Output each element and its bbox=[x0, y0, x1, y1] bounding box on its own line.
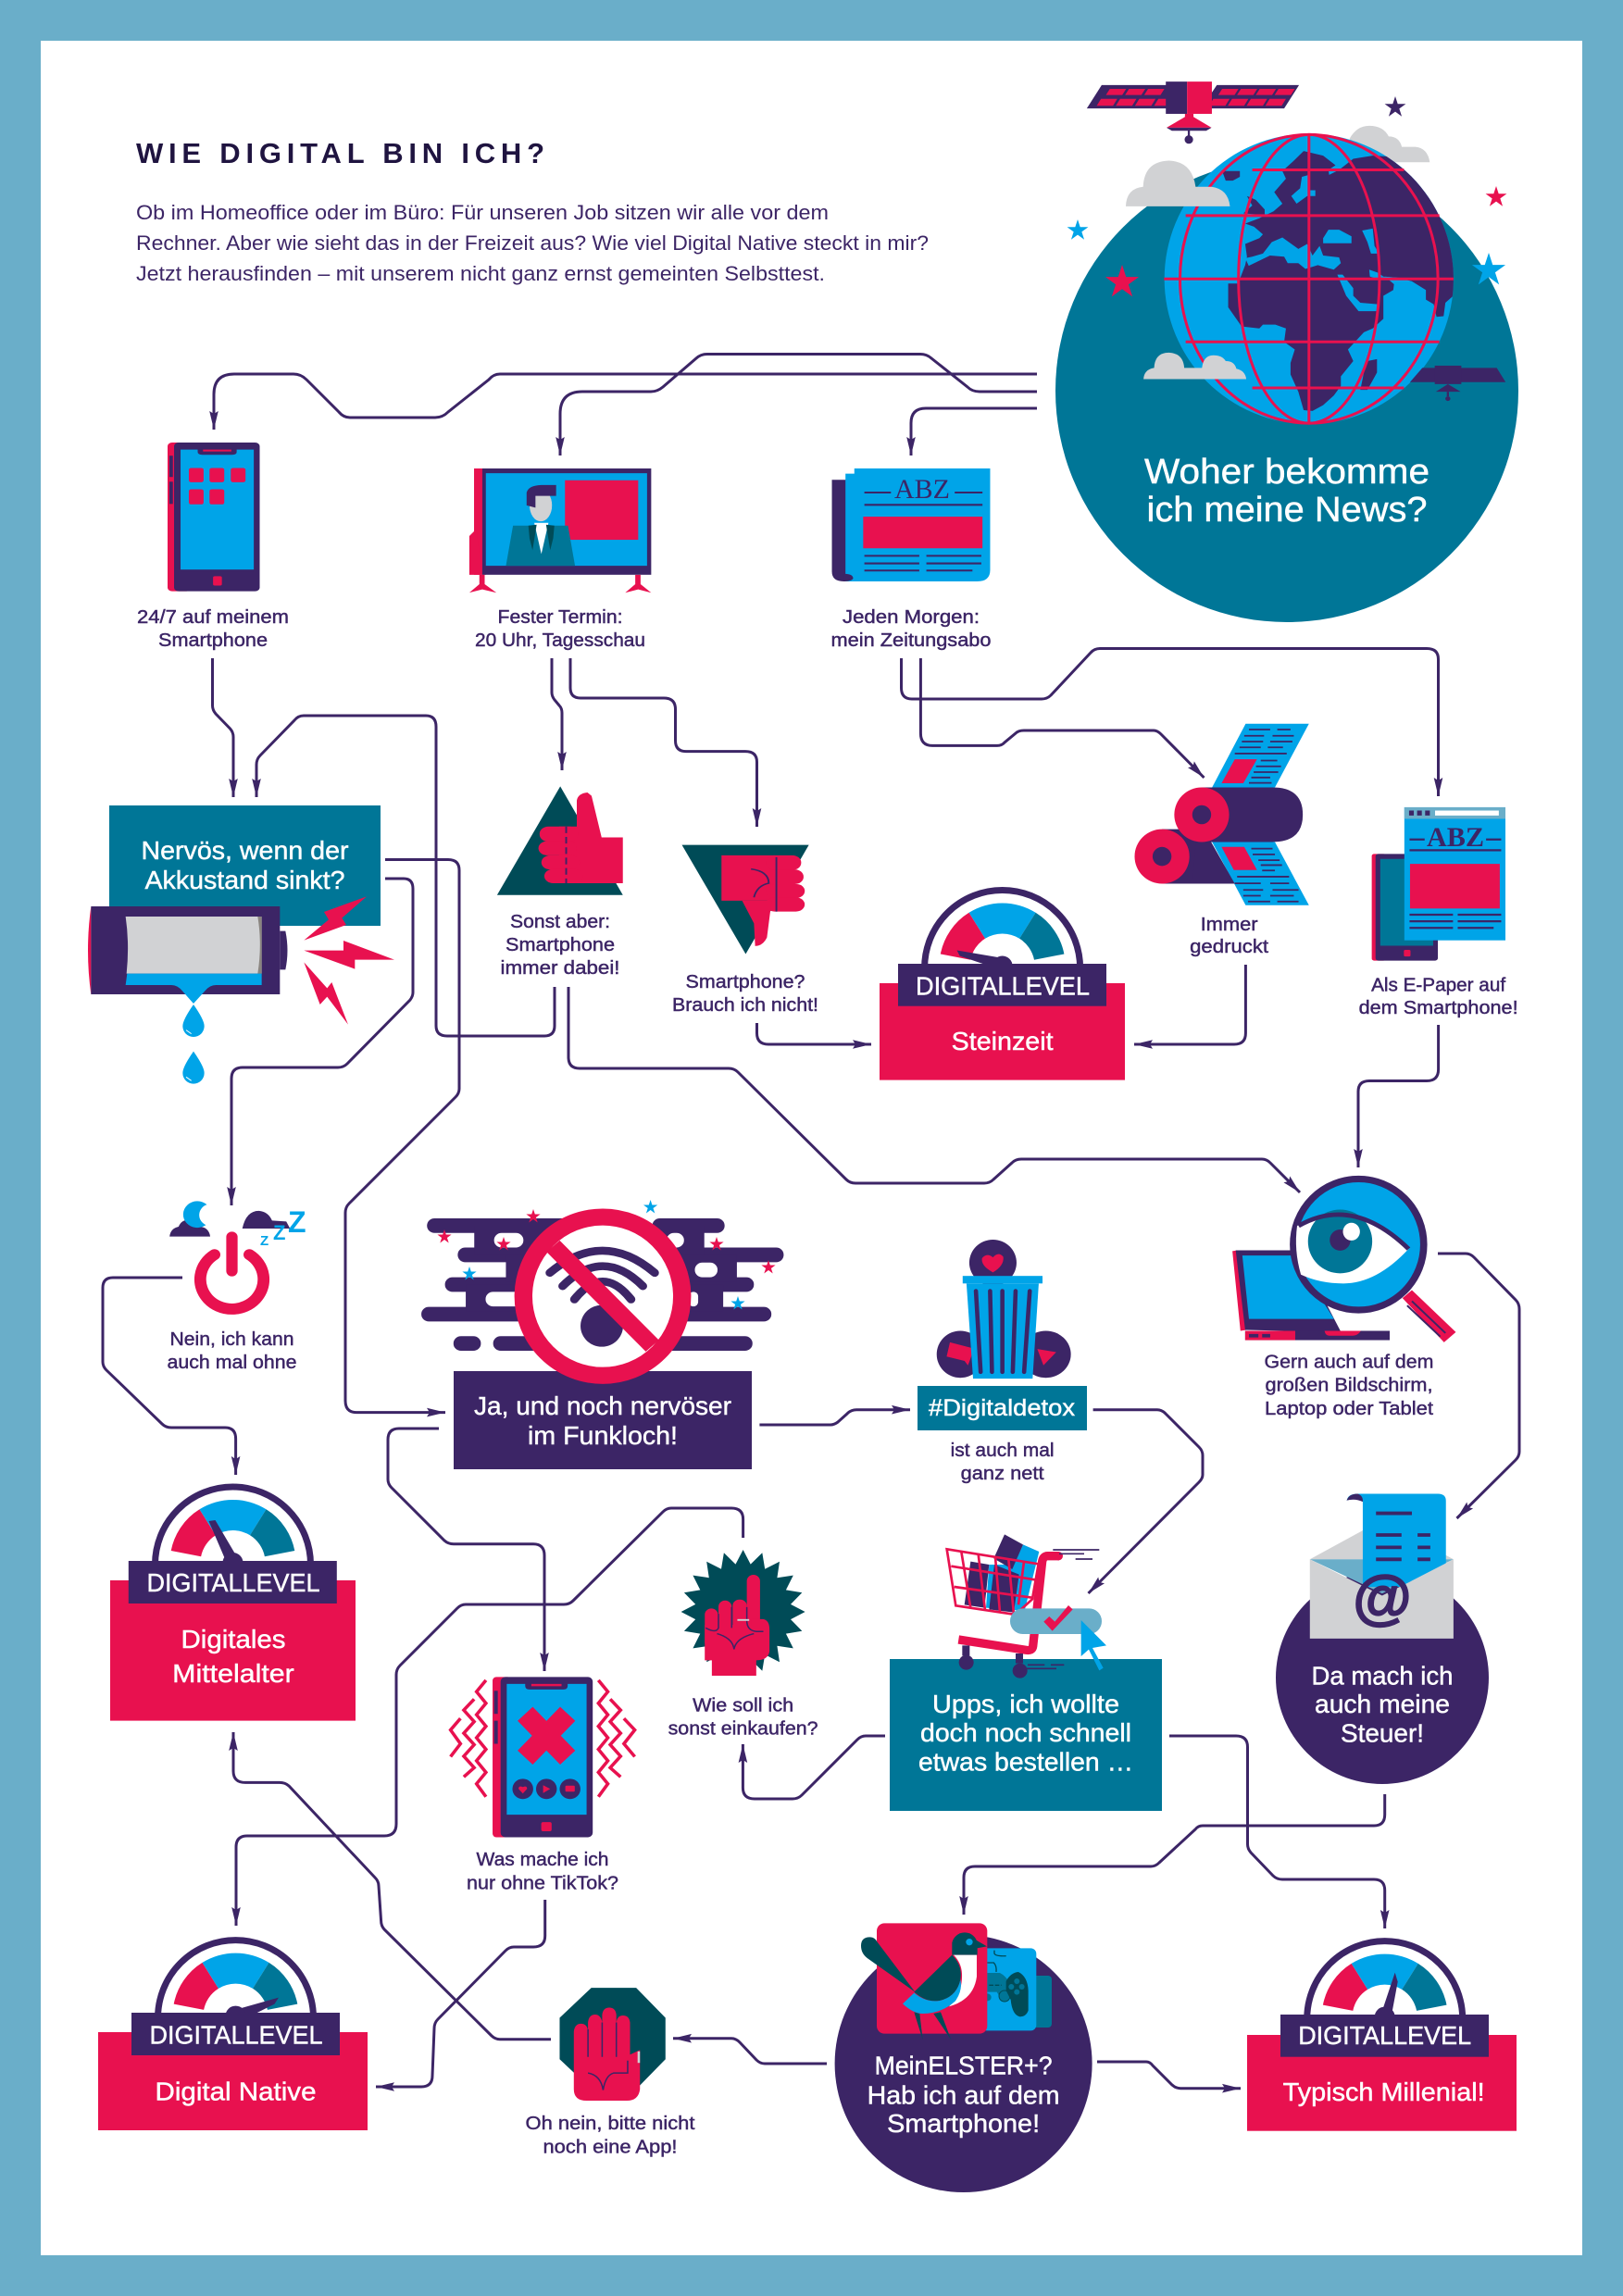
label: nein ich kann: auch mal ohne bbox=[167, 1353, 296, 1373]
result: digitales mittelalter: Digitales bbox=[181, 1625, 285, 1653]
label: e-paper: Als E-Paper auf bbox=[1371, 976, 1506, 996]
label: television: Fester Termin: bbox=[498, 607, 622, 628]
node: meinelster: Smartphone! bbox=[887, 2109, 1040, 2138]
label: sonst aber: Smartphone bbox=[506, 935, 615, 955]
gauge bbox=[1307, 1941, 1463, 2028]
label: sonst aber: Sonst aber: bbox=[510, 912, 610, 932]
label: newspaper: mein Zeitungsabo bbox=[831, 630, 991, 651]
box: upps: etwas bestellen … bbox=[918, 1748, 1133, 1777]
label: e-paper: dem Smartphone! bbox=[1359, 998, 1518, 1018]
icon: elster bird and apps bbox=[861, 1923, 1052, 2040]
flow connectors bbox=[103, 354, 1519, 2089]
result: typisch millenial: DIGITALLEVEL bbox=[1298, 2021, 1471, 2050]
intro text: Rechner. Aber wie sieht das in der Freizeit aus? Wie viel Digital Native steckt in mir? bbox=[136, 231, 929, 255]
result: typisch millenial bbox=[1247, 1941, 1517, 2131]
icon: stop hand bbox=[559, 1988, 666, 2101]
label: e-paper bbox=[1359, 976, 1518, 1018]
label: immer gedruckt: Immer bbox=[1201, 915, 1258, 935]
label: newspaper bbox=[831, 607, 991, 651]
intro text: Jetzt herausfinden – mit unserem nicht ganz ernst gemeinten Selbsttest. bbox=[136, 262, 825, 285]
intro text: Ob im Homeoffice oder im Büro: Für unseren Job sitzen wir alle vor dem bbox=[136, 201, 829, 224]
icon: sleep power button: Z bbox=[288, 1205, 306, 1239]
result: typisch millenial: Typisch Millenial! bbox=[1283, 2078, 1485, 2106]
start question: Woher bekomme bbox=[1144, 453, 1429, 492]
label: oh nein bbox=[526, 2114, 695, 2158]
label: immer gedruckt bbox=[1190, 915, 1269, 957]
title: WIE DIGITAL BIN ICH? bbox=[136, 137, 544, 169]
result: digitales mittelalter: Mittelalter bbox=[172, 1659, 294, 1688]
label: gern auch: Gern auch auf dem bbox=[1265, 1353, 1433, 1373]
result: Steinzeit bbox=[880, 891, 1125, 1080]
icon: trash bin bbox=[937, 1240, 1071, 1379]
box: digitaldetox: #Digitaldetox bbox=[929, 1395, 1076, 1421]
node: steuer: Da mach ich bbox=[1311, 1661, 1454, 1690]
icon: sleep power button: Z bbox=[273, 1221, 285, 1244]
label: sonst aber bbox=[500, 912, 620, 979]
gauge bbox=[157, 1940, 313, 2027]
label: was mache ich bbox=[467, 1850, 618, 1894]
box: upps: Upps, ich wollte bbox=[932, 1690, 1119, 1718]
label: smartphone brauch ich nicht bbox=[672, 972, 818, 1016]
icon: raised finger bbox=[681, 1550, 805, 1676]
result: digital native: Digital Native bbox=[156, 2078, 317, 2106]
node: steuer: Steuer! bbox=[1341, 1719, 1424, 1748]
label: smartphone: Smartphone bbox=[158, 630, 268, 651]
label: ist auch mal: ganz nett bbox=[961, 1464, 1044, 1484]
box: upps: doch noch schnell bbox=[920, 1718, 1131, 1747]
node: steuer bbox=[1276, 1494, 1489, 1784]
label: immer gedruckt: gedruckt bbox=[1190, 937, 1269, 957]
label: oh nein: Oh nein, bitte nicht bbox=[526, 2114, 695, 2134]
start question: ich meine News? bbox=[1146, 491, 1428, 530]
label: television: 20 Uhr, Tagesschau bbox=[475, 630, 645, 651]
label: wie soll ich: sonst einkaufen? bbox=[668, 1718, 818, 1739]
label: ist auch mal bbox=[951, 1441, 1055, 1484]
label: ist auch mal: ist auch mal bbox=[951, 1441, 1055, 1461]
box: nervoes: Akkustand sinkt? bbox=[144, 866, 344, 894]
cloud behind globe bbox=[1350, 126, 1429, 162]
icon: smartphone bbox=[168, 443, 259, 592]
icon: leaking battery bbox=[88, 896, 394, 1084]
icon: printing press bbox=[1135, 724, 1309, 905]
icon: newspaper bbox=[832, 468, 990, 581]
box: upps bbox=[890, 1659, 1162, 1811]
globe bbox=[1164, 134, 1458, 424]
label: wie soll ich bbox=[668, 1696, 818, 1739]
icon: sleep power button bbox=[169, 1201, 306, 1309]
icon: eye magnifier on laptop bbox=[1232, 1179, 1455, 1342]
box: funkloch: im Funkloch! bbox=[528, 1421, 678, 1450]
stars bbox=[1067, 96, 1506, 296]
gauge bbox=[156, 1487, 311, 1573]
icon: thumbs up bbox=[497, 786, 623, 895]
result: digitales mittelalter: DIGITALLEVEL bbox=[146, 1568, 320, 1597]
clouds bbox=[1126, 161, 1230, 206]
label: gern auch: Laptop oder Tablet bbox=[1265, 1399, 1433, 1419]
node: meinelster bbox=[835, 1923, 1092, 2192]
label: was mache ich: Was mache ich bbox=[476, 1850, 609, 1870]
label: nein ich kann: Nein, ich kann bbox=[170, 1329, 294, 1350]
label: oh nein: noch eine App! bbox=[543, 2138, 678, 2158]
box: digitaldetox bbox=[918, 1386, 1087, 1430]
label: smartphone bbox=[137, 607, 289, 651]
label: smartphone: 24/7 auf meinem bbox=[137, 607, 289, 628]
label: smartphone brauch ich nicht: Brauch ich nicht! bbox=[672, 995, 818, 1016]
box: nervoes bbox=[109, 805, 381, 926]
label: wie soll ich: Wie soll ich bbox=[693, 1696, 793, 1716]
icon: newspaper: ABZ bbox=[894, 474, 950, 505]
start question bbox=[1144, 453, 1429, 530]
icon: e-paper on smartphone: ABZ bbox=[1427, 822, 1484, 853]
box: funkloch bbox=[454, 1371, 752, 1469]
start node: globe and question bbox=[1055, 81, 1518, 622]
icon: envelope with at sign bbox=[1310, 1494, 1454, 1639]
node: meinelster: Hab ich auf dem bbox=[868, 2081, 1060, 2110]
result: digital native bbox=[98, 1940, 368, 2130]
icon: thumbs down bbox=[682, 845, 809, 955]
node: steuer: auch meine bbox=[1315, 1690, 1450, 1718]
result: Steinzeit: Steinzeit bbox=[952, 1027, 1054, 1055]
label: gern auch bbox=[1265, 1353, 1433, 1419]
icon: television bbox=[469, 468, 651, 593]
result: digital native: DIGITALLEVEL bbox=[150, 2021, 322, 2050]
result: digitales mittelalter bbox=[110, 1487, 356, 1721]
label: gern auch: großen Bildschirm, bbox=[1265, 1376, 1433, 1396]
icon: shopping cart bbox=[947, 1534, 1106, 1678]
label: was mache ich: nur ohne TikTok? bbox=[467, 1874, 618, 1894]
icon: vibrating phone bbox=[451, 1677, 635, 1837]
label: nein ich kann bbox=[167, 1329, 296, 1373]
box: funkloch: Ja, und noch nervöser bbox=[474, 1391, 731, 1420]
icon: no wifi bbox=[421, 1200, 783, 1376]
satellite shadow bbox=[1410, 366, 1505, 401]
intro text bbox=[136, 201, 929, 285]
box: nervoes: Nervös, wenn der bbox=[141, 836, 348, 865]
label: television bbox=[475, 607, 645, 651]
gauge bbox=[925, 891, 1080, 976]
label: sonst aber: immer dabei! bbox=[500, 958, 620, 979]
label: newspaper: Jeden Morgen: bbox=[843, 607, 980, 628]
icon: e-paper on smartphone bbox=[1372, 807, 1505, 961]
icon: envelope with at sign: @ bbox=[1353, 1563, 1412, 1630]
node: meinelster: MeinELSTER+? bbox=[875, 2052, 1053, 2080]
wifi stars bbox=[437, 1200, 776, 1309]
satellite bbox=[1087, 81, 1299, 144]
label: smartphone brauch ich nicht: Smartphone? bbox=[685, 972, 805, 992]
icon: sleep power button: Z bbox=[260, 1233, 268, 1249]
result: Steinzeit: DIGITALLEVEL bbox=[916, 972, 1090, 1001]
